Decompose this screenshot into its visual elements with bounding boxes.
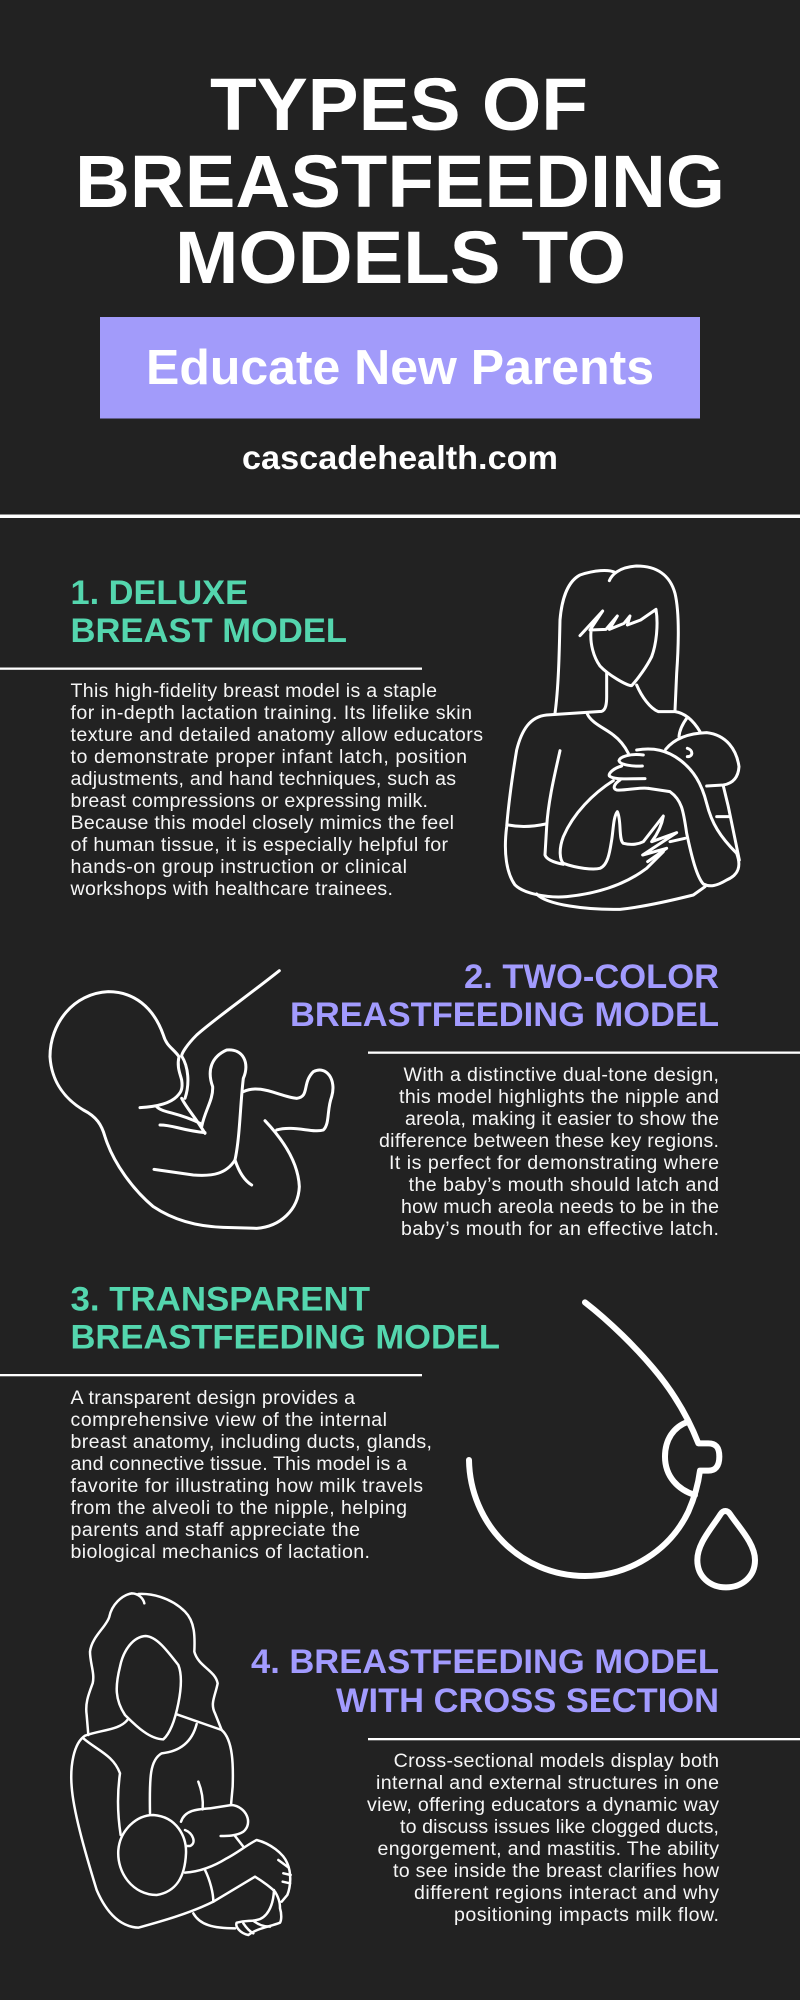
body text 1: workshops with healthcare trainees. — [70, 878, 393, 900]
body text 1: hands-on group instruction or clinical — [70, 856, 407, 878]
icon: mother cradling baby — [71, 1593, 291, 1935]
heading 4: WITH CROSS SECTION — [336, 1682, 719, 1720]
body text 2: With a distinctive dual-tone design, — [404, 1064, 719, 1086]
body text 2: baby’s mouth for an effective latch. — [401, 1218, 719, 1240]
body text 2: difference between these key regions. — [379, 1130, 719, 1152]
body text 3: favorite for illustrating how milk travels — [70, 1475, 423, 1497]
body text 3: A transparent design provides a — [70, 1387, 355, 1409]
body text 4: to discuss issues like clogged ducts, — [400, 1816, 719, 1838]
body text 4: positioning impacts milk flow. — [454, 1904, 719, 1926]
header panel — [75, 63, 725, 476]
body text 3: from the alveoli to the nipple, helping — [70, 1497, 407, 1519]
body text 4: different regions interact and why — [414, 1882, 719, 1904]
body text 1: This high-fidelity breast model is a staple — [70, 680, 437, 702]
body text 2: how much areola needs to be in the — [401, 1196, 719, 1218]
body text 3: breast anatomy, including ducts, glands, — [70, 1431, 432, 1453]
icon: mother nursing baby — [505, 566, 739, 909]
title: MODELS TO — [175, 216, 626, 299]
title: TYPES OF — [210, 63, 588, 146]
body text 4: view, offering educators a dynamic way — [367, 1794, 719, 1816]
panel: 1 deluxe breast model — [0, 566, 739, 909]
body text 3: comprehensive view of the internal — [70, 1409, 387, 1431]
body text 1: adjustments, and hand techniques, such as — [70, 768, 456, 790]
title: BREASTFEEDING — [75, 140, 725, 223]
subtitle banner — [100, 317, 700, 418]
panel: 3 transparent breastfeeding model — [0, 1280, 755, 1587]
heading 3: 3. TRANSPARENT — [70, 1280, 370, 1318]
icon: breast with milk drop — [469, 1302, 755, 1587]
body text 2: the baby’s mouth should latch and — [409, 1174, 719, 1196]
heading 3 — [70, 1280, 500, 1356]
website: cascadehealth.com — [242, 439, 558, 476]
subtitle banner: Educate New Parents — [146, 341, 654, 395]
icon: baby latching — [50, 971, 333, 1228]
heading 1 — [70, 574, 347, 650]
body text 2: this model highlights the nipple and — [399, 1086, 719, 1108]
heading 1: 1. DELUXE — [70, 574, 248, 612]
body text 1: for in-depth lactation training. Its lifelike skin — [70, 702, 472, 724]
panel: 2 two-color breastfeeding model — [50, 958, 800, 1240]
body text 1: breast compressions or expressing milk. — [70, 790, 428, 812]
body text 4: engorgement, and mastitis. The ability — [378, 1838, 719, 1860]
body text 4: Cross-sectional models display both — [394, 1750, 719, 1772]
title — [75, 63, 725, 299]
panel: 4 breastfeeding model with cross section — [71, 1593, 800, 1935]
heading 4 — [251, 1643, 719, 1720]
body text 3: and connective tissue. This model is a — [70, 1453, 407, 1475]
body text 4: internal and external structures in one — [376, 1772, 719, 1794]
body text 1: of human tissue, it is especially helpful for — [70, 834, 448, 856]
body text 1: texture and detailed anatomy allow educators — [70, 724, 483, 746]
body text 2: It is perfect for demonstrating where — [389, 1152, 719, 1174]
body text 2 — [379, 1064, 719, 1240]
body text 3 — [70, 1387, 432, 1563]
body text 4: to see inside the breast clarifies how — [393, 1860, 720, 1882]
heading 2 — [290, 958, 719, 1034]
heading 2: 2. TWO-COLOR — [464, 958, 719, 996]
body text 3: parents and staff appreciate the — [70, 1519, 360, 1541]
body text 1: Because this model closely mimics the feel — [70, 812, 454, 834]
heading 4: 4. BREASTFEEDING MODEL — [251, 1643, 719, 1681]
body text 3: biological mechanics of lactation. — [70, 1541, 370, 1563]
body text 1 — [70, 680, 483, 900]
heading 1: BREAST MODEL — [70, 612, 347, 650]
body text 4 — [367, 1750, 720, 1926]
heading 3: BREASTFEEDING MODEL — [70, 1318, 500, 1356]
body text 2: areola, making it easier to show the — [405, 1108, 719, 1130]
body text 1: to demonstrate proper infant latch, position — [70, 746, 467, 768]
heading 2: BREASTFEEDING MODEL — [290, 996, 719, 1034]
